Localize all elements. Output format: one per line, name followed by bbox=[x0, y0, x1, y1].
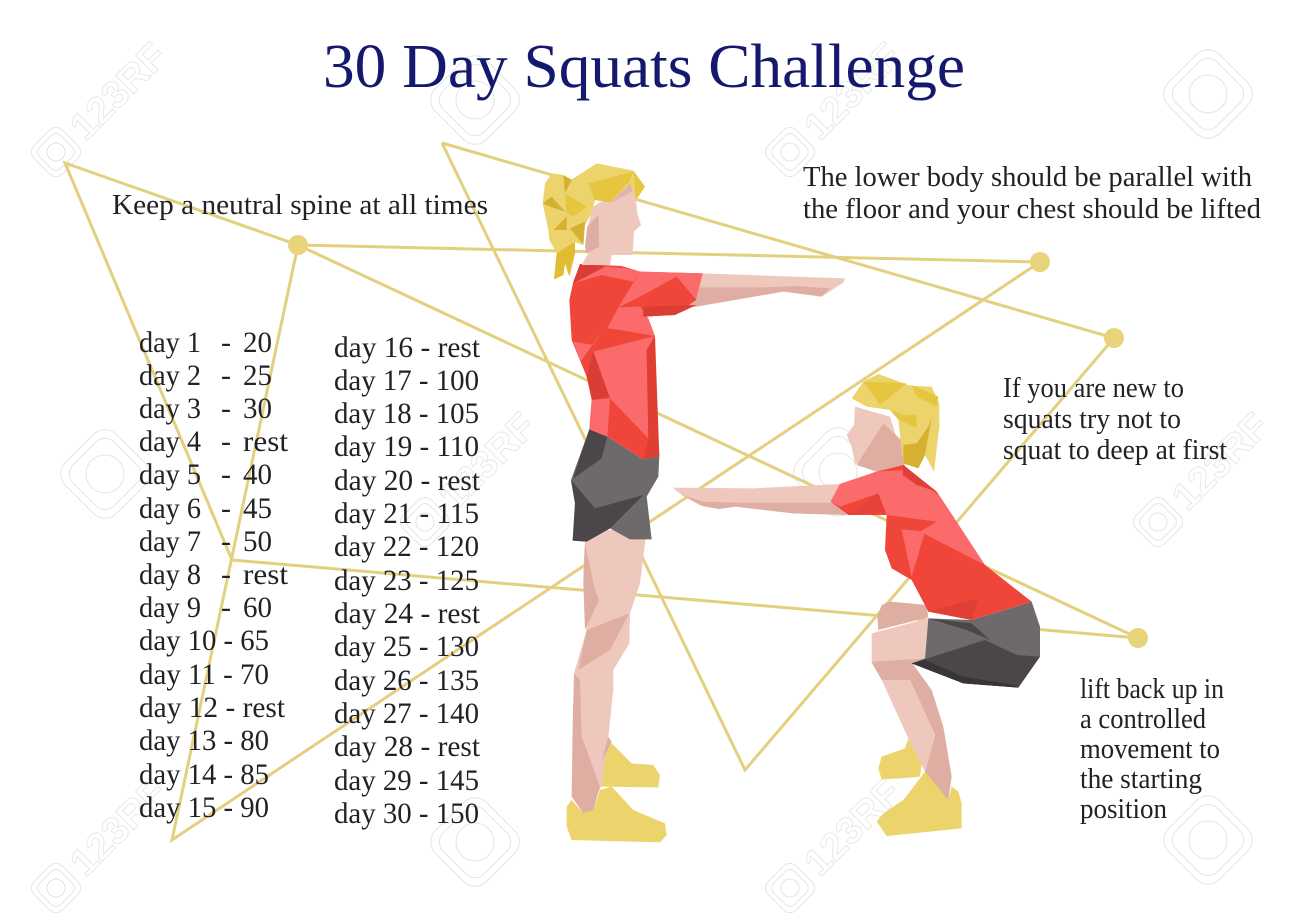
schedule: days 1 to 15: day 10 - 65 bbox=[139, 624, 269, 657]
schedule: days 1 to 15: - bbox=[221, 359, 231, 392]
note: lift back up: a controlled bbox=[1080, 704, 1206, 735]
schedule: days 16 to 30: day 27 - 140 bbox=[334, 697, 479, 730]
schedule: days 1 to 15: day 4 bbox=[139, 425, 201, 458]
note: new to squats: squats try not to bbox=[1003, 404, 1181, 435]
schedule: days 1 to 15: - bbox=[221, 558, 231, 591]
note: lift back up: position bbox=[1080, 794, 1167, 825]
watermarks: 123RF bbox=[62, 771, 176, 884]
schedule: days 1 to 15: day 13 - 80 bbox=[139, 724, 269, 757]
schedule: days 16 to 30: day 26 - 135 bbox=[334, 664, 479, 697]
note: lift back up: the starting bbox=[1080, 764, 1202, 795]
hair bbox=[852, 374, 939, 472]
schedule: days 16 to 30: day 19 - 110 bbox=[334, 430, 479, 463]
schedule: days 1 to 15: day 7 bbox=[139, 525, 201, 558]
schedule: days 1 to 15: day 5 bbox=[139, 458, 201, 491]
arm bbox=[673, 484, 848, 515]
arm bbox=[670, 273, 845, 307]
note: neutral spine: Keep a neutral spine at all times bbox=[112, 189, 488, 221]
note: lower body: The lower body should be parallel with bbox=[803, 161, 1252, 193]
schedule: days 1 to 15: day 15 - 90 bbox=[139, 791, 269, 824]
note: lift back up bbox=[1080, 674, 1224, 825]
schedule: days 16 to 30: day 17 - 100 bbox=[334, 364, 479, 397]
note: new to squats: squat to deep at first bbox=[1003, 435, 1227, 466]
schedule: days 16 to 30: day 24 - rest bbox=[334, 597, 481, 630]
schedule: days 16 to 30: day 29 - 145 bbox=[334, 764, 479, 797]
schedule: days 16 to 30: day 30 - 150 bbox=[334, 797, 479, 830]
schedule: days 1 to 15: day 6 bbox=[139, 492, 201, 525]
schedule: days 1 to 15 bbox=[139, 326, 289, 824]
schedule: days 16 to 30: day 18 - 105 bbox=[334, 397, 479, 430]
schedule: days 1 to 15: 20 bbox=[243, 326, 272, 359]
schedule: days 1 to 15: 45 bbox=[243, 492, 272, 525]
squat upper body bbox=[673, 374, 1040, 688]
note: new to squats bbox=[1003, 373, 1227, 466]
schedule: days 1 to 15: - bbox=[221, 591, 231, 624]
schedule: days 1 to 15: 30 bbox=[243, 392, 272, 425]
dots on lines bbox=[288, 235, 1148, 648]
schedule: days 1 to 15: day 1 bbox=[139, 326, 201, 359]
shirt bbox=[569, 264, 703, 459]
schedule: days 1 to 15: day 11 - 70 bbox=[139, 658, 269, 691]
connecting gold lines bbox=[65, 143, 1138, 840]
schedule: days 1 to 15: day 9 bbox=[139, 591, 201, 624]
shorts bbox=[912, 602, 1040, 688]
schedule: days 1 to 15: day 12 - rest bbox=[139, 691, 286, 724]
schedule: days 16 to 30: day 25 - 130 bbox=[334, 630, 479, 663]
schedule: days 1 to 15: day 3 bbox=[139, 392, 201, 425]
title: 30 Day Squats Challenge bbox=[323, 33, 965, 101]
standing legs and feet bbox=[567, 530, 667, 842]
schedule: days 1 to 15: - bbox=[221, 392, 231, 425]
watermarks: 123RF bbox=[62, 35, 176, 148]
note: lift back up: movement to bbox=[1080, 734, 1220, 765]
figure: squatting woman bbox=[673, 374, 1040, 836]
schedule: days 16 to 30: day 23 - 125 bbox=[334, 564, 479, 597]
watermarks: 123RF bbox=[431, 405, 545, 518]
head and neck bbox=[847, 407, 905, 473]
figure: standing woman bbox=[543, 163, 845, 842]
shirt bbox=[831, 465, 1032, 620]
schedule: days 1 to 15: rest bbox=[243, 558, 289, 591]
schedule: days 1 to 15: - bbox=[221, 525, 231, 558]
schedule: days 1 to 15: - bbox=[221, 326, 231, 359]
schedule: days 16 to 30: day 28 - rest bbox=[334, 730, 481, 763]
schedule: days 1 to 15: rest bbox=[243, 425, 289, 458]
note: lift back up: lift back up in bbox=[1080, 674, 1224, 705]
hair and ponytail bbox=[543, 163, 645, 279]
schedule: days 16 to 30: day 21 - 115 bbox=[334, 497, 479, 530]
schedule: days 1 to 15: - bbox=[221, 425, 231, 458]
watermarks: 123RF bbox=[796, 35, 910, 148]
schedule: days 1 to 15: day 8 bbox=[139, 558, 201, 591]
schedule: days 1 to 15: day 14 - 85 bbox=[139, 758, 269, 791]
note: lower body bbox=[803, 161, 1261, 225]
watermarks: 123RF bbox=[796, 771, 910, 884]
schedule: days 1 to 15: day 2 bbox=[139, 359, 201, 392]
thigh bbox=[872, 602, 928, 680]
schedule: days 1 to 15: 50 bbox=[243, 525, 272, 558]
note: new to squats: If you are new to bbox=[1003, 373, 1184, 404]
standing upper body bbox=[543, 163, 845, 542]
head and neck bbox=[582, 173, 641, 265]
schedule: days 16 to 30 bbox=[334, 331, 481, 830]
note: lower body: the floor and your chest should be lifted bbox=[803, 193, 1261, 225]
shorts bbox=[571, 429, 659, 542]
schedule: days 16 to 30: day 22 - 120 bbox=[334, 530, 479, 563]
schedule: days 1 to 15: - bbox=[221, 492, 231, 525]
schedule: days 16 to 30: day 20 - rest bbox=[334, 464, 481, 497]
squat shins and feet bbox=[872, 660, 962, 836]
schedule: days 1 to 15: 25 bbox=[243, 359, 272, 392]
schedule: days 1 to 15: 40 bbox=[243, 458, 272, 491]
schedule: days 16 to 30: day 16 - rest bbox=[334, 331, 481, 364]
schedule: days 1 to 15: - bbox=[221, 458, 231, 491]
schedule: days 1 to 15: 60 bbox=[243, 591, 272, 624]
watermarks: 123RF bbox=[1164, 405, 1278, 518]
